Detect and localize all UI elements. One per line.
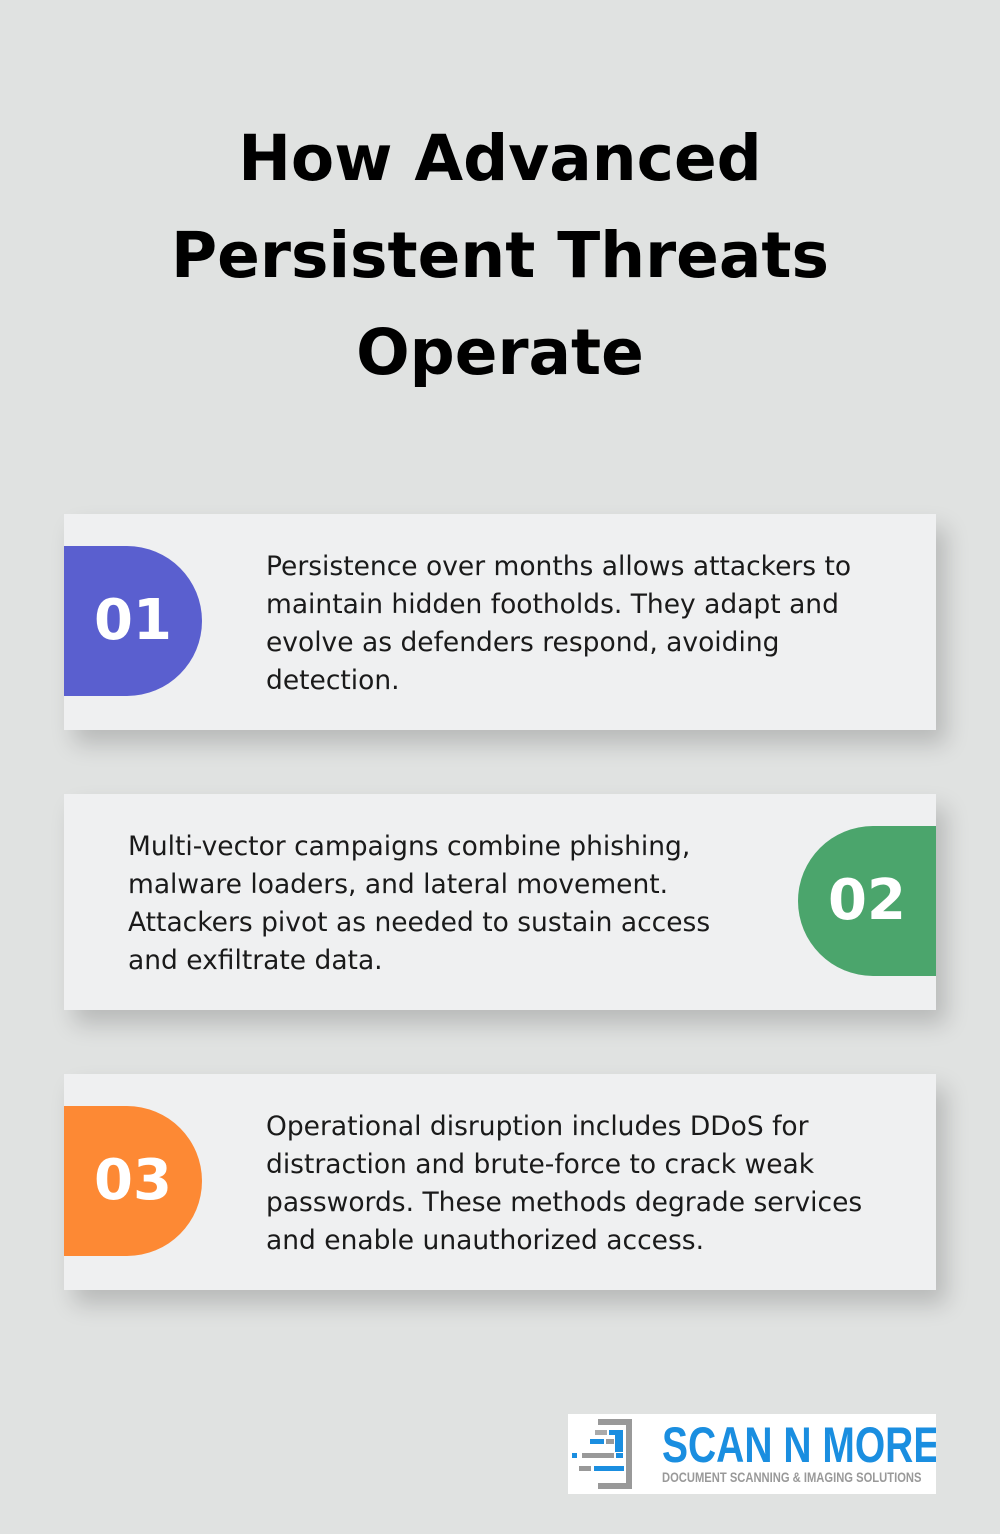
panel: step 02 bbox=[64, 794, 936, 1010]
panel: step 03 bbox=[64, 1074, 936, 1290]
badge 01 bbox=[64, 546, 202, 696]
badge 03 bbox=[64, 1106, 202, 1256]
badge 03: 03 bbox=[94, 1148, 172, 1213]
text 01: Persistence over months allows attackers to maintain hidden footholds. They adapt and evolve as defenders respond, avoiding detection. bbox=[266, 551, 851, 696]
text 02: Multi-vector campaigns combine phishing, malware loaders, and lateral movement. Attackers pivot as needed to sustain access and exfiltrate data. bbox=[128, 831, 710, 976]
badge 01: 01 bbox=[94, 588, 172, 653]
title bbox=[171, 122, 829, 389]
logo text: SCAN N MORE bbox=[662, 1417, 936, 1473]
title: Operate bbox=[356, 316, 644, 389]
panel: step 01 bbox=[64, 514, 936, 730]
badge 02: 02 bbox=[828, 868, 906, 933]
logo bbox=[568, 1414, 936, 1494]
logo icon bbox=[572, 1419, 632, 1489]
title: How Advanced bbox=[238, 122, 762, 195]
logo: DOCUMENT SCANNING & IMAGING SOLUTIONS bbox=[662, 1469, 921, 1485]
text 03: Operational disruption includes DDoS for distraction and brute-force to crack weak passwords. These methods degrade services and enable unauthorized access. bbox=[266, 1111, 862, 1256]
title: Persistent Threats bbox=[171, 219, 829, 292]
badge 02 bbox=[798, 826, 936, 976]
